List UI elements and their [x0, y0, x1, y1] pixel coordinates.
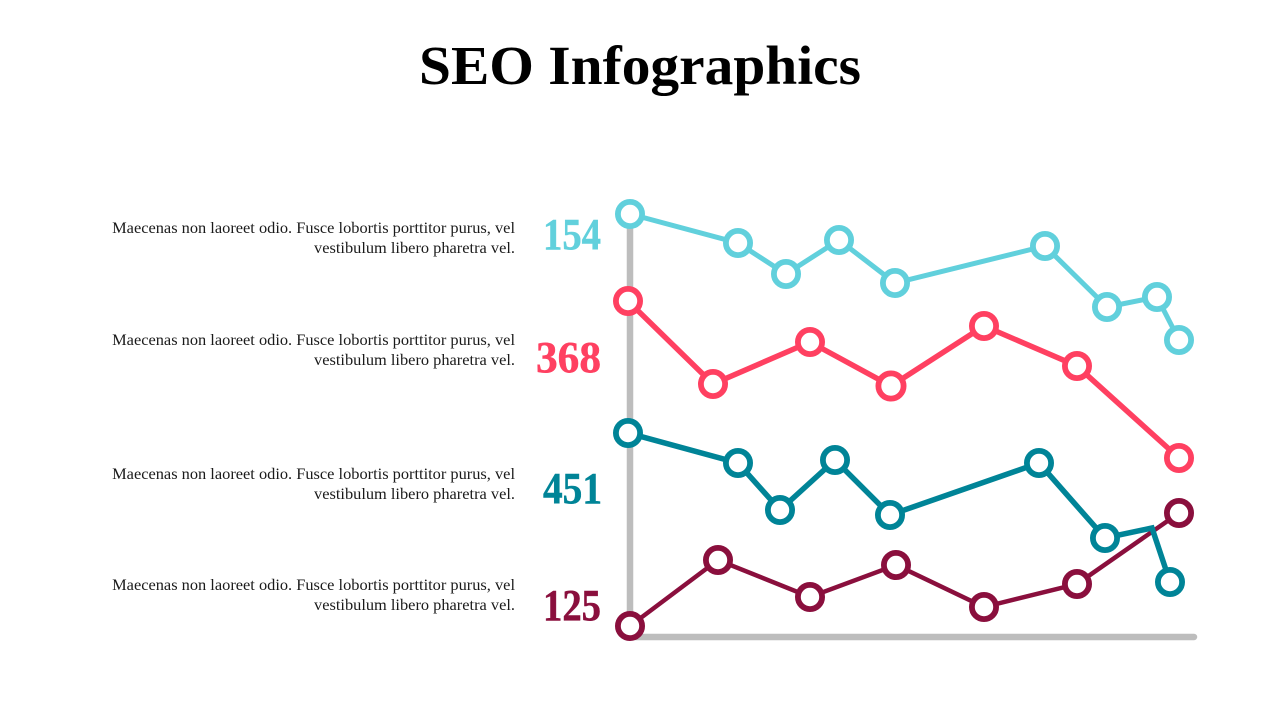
title: SEO Infographics: [419, 35, 861, 96]
text block 1: vestibulum libero pharetra vel.: [314, 240, 515, 257]
value: 368: 368: [536, 333, 601, 382]
text block 1: Maecenas non laoreet odio. Fusce lobortis porttitor purus, vel: [112, 220, 515, 237]
text block 4: vestibulum libero pharetra vel.: [314, 597, 515, 614]
value: 154: 154: [543, 210, 601, 259]
series: teal line: [616, 421, 1182, 594]
text block 4: Maecenas non laoreet odio. Fusce lobortis porttitor purus, vel: [112, 577, 515, 594]
series: maroon line: [618, 501, 1191, 638]
text block 3: [112, 466, 515, 503]
text block 1: [112, 220, 515, 257]
text block 4: [112, 577, 515, 614]
series: red line: [616, 289, 1191, 470]
text block 2: [112, 332, 515, 369]
text block 2: Maecenas non laoreet odio. Fusce lobortis porttitor purus, vel: [112, 332, 515, 349]
chart axes: [630, 215, 1194, 637]
series: light blue line: [618, 202, 1191, 352]
text block 3: Maecenas non laoreet odio. Fusce lobortis porttitor purus, vel: [112, 466, 515, 483]
value: 125: 125: [543, 581, 601, 630]
text block 3: vestibulum libero pharetra vel.: [314, 486, 515, 503]
text block 2: vestibulum libero pharetra vel.: [314, 352, 515, 369]
value: 451: 451: [543, 464, 602, 513]
